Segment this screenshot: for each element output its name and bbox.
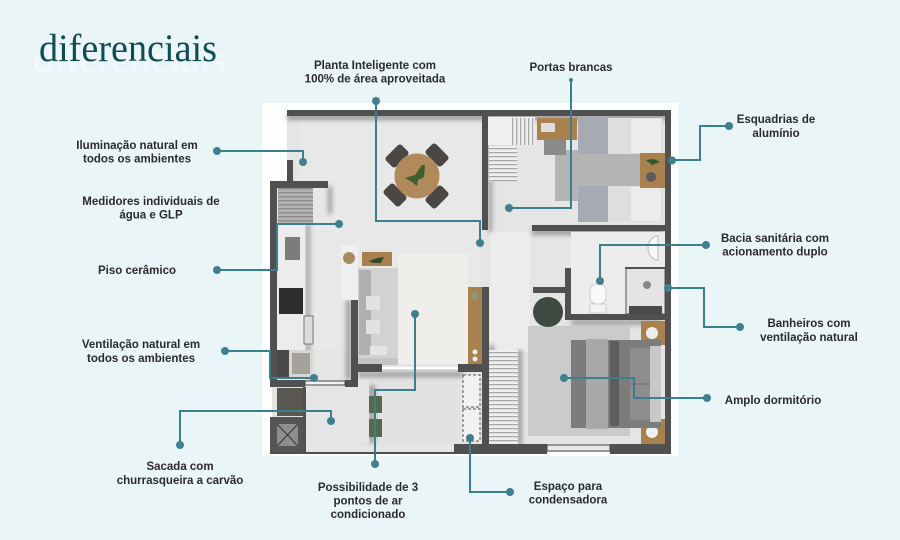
balcony (270, 375, 480, 453)
leader: portas brancas (505, 78, 573, 212)
leader: ar condicionado (371, 310, 419, 468)
floor plan (262, 103, 678, 456)
bedroom one (488, 117, 665, 222)
label: bacia: acionamento duplo (722, 246, 828, 258)
label: dormitorio: Amplo dormitório (725, 395, 821, 407)
label: portas brancas: Portas brancas (529, 62, 613, 74)
label: ventilacao: Ventilação natural em (82, 339, 200, 351)
label: sacada: churrasqueira a carvão (117, 475, 243, 487)
label: esquadrias: Esquadrias de (737, 114, 815, 126)
leader: iluminacao (213, 147, 307, 166)
bedroom two (489, 297, 665, 445)
label: planta inteligente: Planta Inteligente com (314, 60, 436, 72)
wall shadows (287, 114, 667, 445)
plan backing (262, 103, 678, 456)
leader: dormitorio (560, 374, 711, 402)
label: banheiros: ventilação natural (760, 332, 858, 344)
label: ar condicionado: Possibilidade de 3 (318, 482, 418, 494)
label: iluminacao: Iluminação natural em (76, 140, 198, 152)
leader: sacada (176, 411, 335, 449)
title: diferenciais (39, 27, 217, 70)
label: banheiros: Banheiros com (767, 318, 851, 330)
label: condensadora: condensadora (529, 494, 608, 506)
label: medidores: água e GLP (119, 210, 183, 222)
leader: planta inteligente (372, 97, 484, 247)
label: ar condicionado: condicionado (331, 509, 405, 521)
walls (270, 110, 671, 454)
leader: piso (213, 220, 343, 274)
leader: ventilacao (221, 347, 318, 382)
label: piso: Piso cerâmico (98, 265, 176, 277)
floor (272, 112, 668, 452)
leader: banheiros (664, 284, 744, 331)
label: planta inteligente: 100% de área aproveitada (305, 74, 446, 86)
label: bacia: Bacia sanitária com (721, 233, 829, 245)
bathroom (571, 232, 665, 314)
dining table (382, 142, 450, 210)
leader: condensadora (466, 434, 514, 496)
label: ar condicionado: pontos de ar (333, 496, 403, 508)
label: ventilacao: todos os ambientes (87, 353, 195, 365)
leader: bacia (596, 241, 710, 285)
label: sacada: Sacada com (146, 461, 214, 473)
label: esquadrias: alumínio (752, 128, 800, 140)
label: medidores: Medidores individuais de (82, 196, 220, 208)
label: condensadora: Espaço para (534, 481, 603, 493)
living room (341, 245, 482, 365)
leader: esquadrias (668, 122, 733, 164)
kitchen (276, 188, 313, 380)
title: diferenciais (33, 40, 227, 81)
label: iluminacao: todos os ambientes (83, 154, 191, 166)
